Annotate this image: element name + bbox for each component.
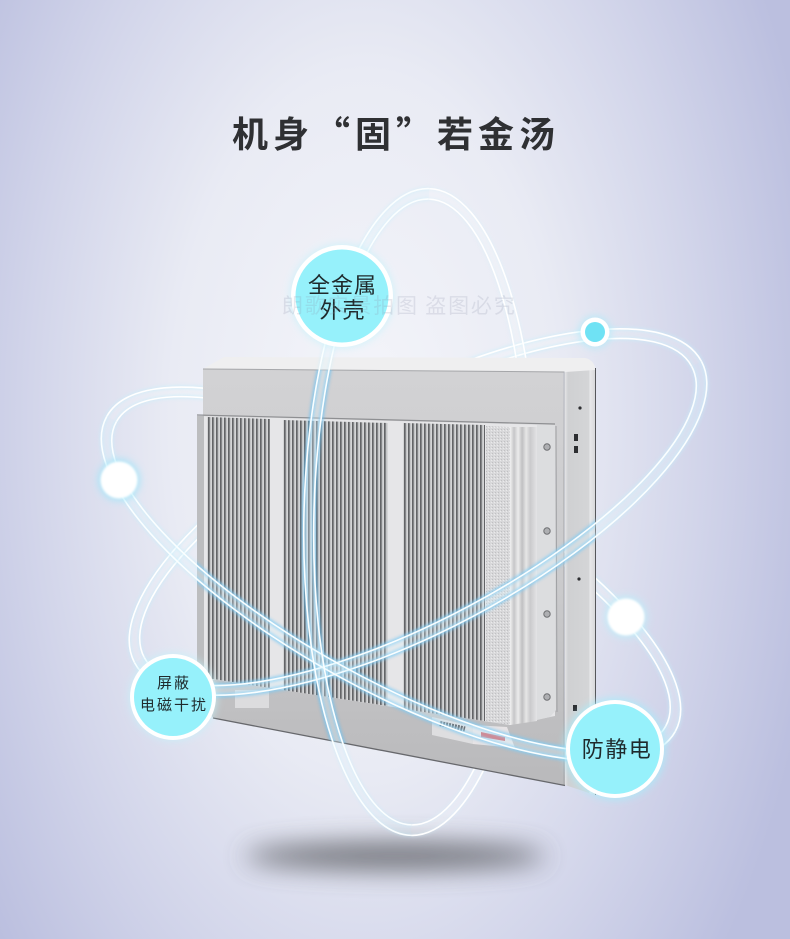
label left [235,690,269,708]
node: cyan dot top right [579,316,611,348]
orbit back halves [79,189,731,839]
label barcode [432,717,473,744]
orbit C front [295,185,429,835]
side ribs [510,427,537,725]
right side strip [565,370,595,795]
badge: 防静电: 防静电 [582,732,652,764]
badge: 屏蔽电磁干扰 [129,653,217,741]
watermark: 朗歌实景拍图 盗图必究 [282,290,517,320]
title: 机身“固”若金汤 [232,106,560,158]
back plate [203,369,565,785]
screws [544,444,550,700]
textured block [486,426,510,725]
badge: 屏蔽电磁干扰: 屏蔽 [157,672,191,693]
floor shadow [245,842,545,870]
badge: 屏蔽电磁干扰: 电磁干扰 [140,694,208,715]
badge: 全金属外壳: 全金属 [308,268,377,300]
device: industrial panel PC rear [197,357,596,795]
heatsink left edge [197,416,204,677]
fins section 3 [403,423,485,721]
fins section 2 [283,420,388,706]
badge: 防静电 [564,698,666,800]
badge: 全金属外壳: 外壳 [319,293,366,325]
fins section 1 [207,417,270,688]
node: white dot left [98,459,140,501]
orbit A back [79,257,701,663]
mounting flange [537,425,556,720]
orbit B back [107,316,731,732]
orbit blue glow on device [197,370,595,762]
side ports [573,406,582,711]
orbit C back [411,189,545,839]
front bezel [203,357,596,372]
heatsink base [197,416,555,725]
orbit B front [51,416,675,832]
orbit front halves [51,185,757,835]
badge: 全金属外壳 [290,244,394,348]
orbit A front [135,361,757,767]
label warning [473,725,515,748]
node: white dot right [605,596,647,638]
